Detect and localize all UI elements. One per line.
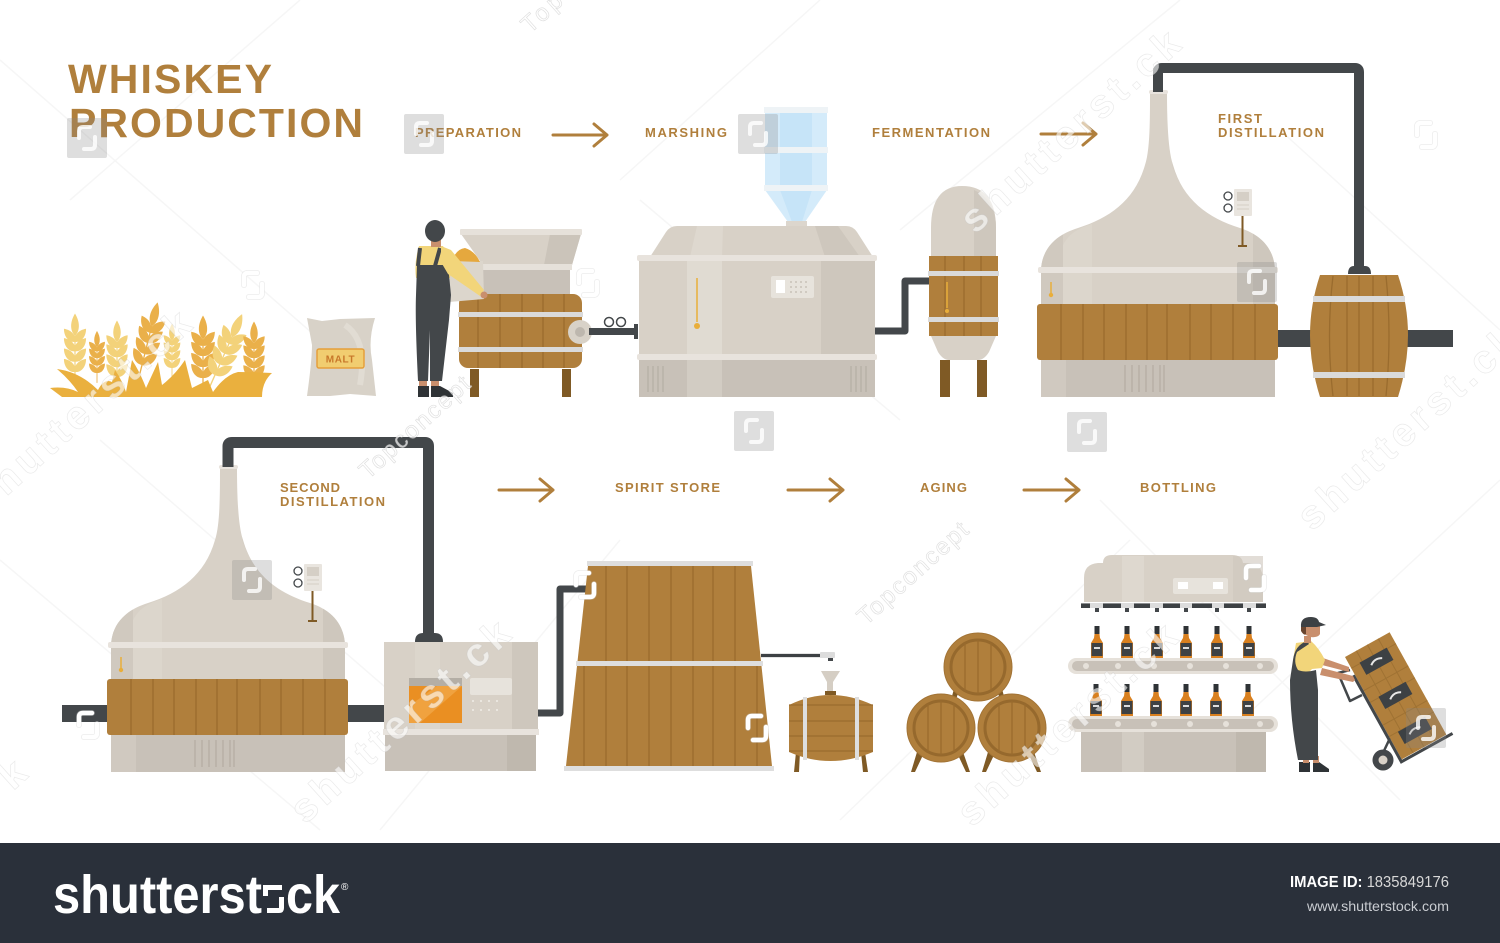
malt sack bbox=[307, 318, 376, 396]
wheat field bbox=[50, 299, 272, 397]
watermark overlay: Topconcept bbox=[852, 516, 974, 630]
title: PRODUCTION bbox=[69, 100, 363, 146]
watermark overlay: shutterst.ck bbox=[952, 21, 1190, 242]
label: marshing: MARSHING bbox=[645, 125, 727, 140]
malt mill machine bbox=[458, 229, 592, 397]
first still outlet pipes bbox=[1278, 330, 1453, 347]
footer logo: ® bbox=[341, 882, 349, 893]
stacked aging barrels bbox=[907, 633, 1046, 772]
watermark overlay: Topconcept bbox=[354, 370, 476, 484]
wooden barrel bbox=[1310, 266, 1408, 397]
label: second distillation: DISTILLATION bbox=[280, 494, 385, 509]
pipe with gauges bbox=[589, 318, 638, 339]
marshing tank bbox=[637, 226, 877, 397]
image id: IMAGE ID: 1835849176 bbox=[1290, 874, 1449, 891]
furnace box bbox=[383, 642, 539, 771]
spirit store vat bbox=[564, 561, 774, 771]
arrow bbox=[1041, 123, 1096, 145]
pipe: second still to furnace bbox=[228, 442, 443, 642]
pipe: tank to fermenter bbox=[875, 281, 930, 331]
label: second distillation: SECOND bbox=[280, 480, 340, 495]
label: aging: AGING bbox=[920, 480, 967, 495]
second still inlet pipe bbox=[62, 705, 108, 722]
label: first distillation: DISTILLATION bbox=[1218, 125, 1324, 140]
arrow bbox=[788, 479, 843, 501]
conveyor 1 bbox=[1068, 658, 1278, 674]
footer logo: ck bbox=[286, 865, 341, 925]
spout bbox=[761, 652, 835, 661]
pipe: first still to barrel bbox=[1158, 68, 1359, 268]
arrow bbox=[1024, 479, 1079, 501]
arrow bbox=[499, 479, 553, 501]
watermark overlay: shutterst.ck bbox=[949, 614, 1187, 835]
website url: www.shutterstock.com bbox=[1306, 898, 1449, 914]
label: fermentation: FERMENTATION bbox=[872, 125, 990, 140]
label: bottling: BOTTLING bbox=[1140, 480, 1216, 495]
label: preparation: PREPARATION bbox=[415, 125, 521, 140]
second still bbox=[107, 465, 350, 772]
footer bar bbox=[0, 843, 1500, 943]
arrow bbox=[553, 124, 607, 146]
pipe: furnace to spirit store bbox=[538, 589, 586, 713]
bottles row 1 bbox=[1091, 626, 1255, 658]
bottling worker bbox=[1290, 617, 1355, 772]
worker with malt bag bbox=[415, 220, 488, 397]
title: WHISKEY bbox=[68, 56, 272, 102]
filling machine bbox=[1081, 555, 1266, 612]
footer logo: shutterst bbox=[53, 865, 262, 925]
label: first distillation bbox=[1218, 111, 1324, 140]
conveyor 2 and base bbox=[1068, 716, 1278, 772]
malt sack: MALT bbox=[326, 354, 355, 366]
first still bbox=[1037, 90, 1280, 397]
label: spirit store: SPIRIT STORE bbox=[615, 480, 720, 495]
label: second distillation bbox=[280, 480, 385, 509]
small barrel with funnel bbox=[789, 671, 873, 772]
label: first distillation: FIRST bbox=[1218, 111, 1262, 126]
watermark overlay: shutterst.ck bbox=[282, 611, 520, 832]
bottles row 2 bbox=[1090, 684, 1254, 716]
fermentation tank bbox=[928, 186, 999, 397]
water bottle bbox=[764, 107, 828, 227]
title bbox=[68, 56, 363, 146]
hand truck with crates bbox=[1338, 629, 1453, 770]
second still outlet pipe bbox=[348, 705, 385, 722]
